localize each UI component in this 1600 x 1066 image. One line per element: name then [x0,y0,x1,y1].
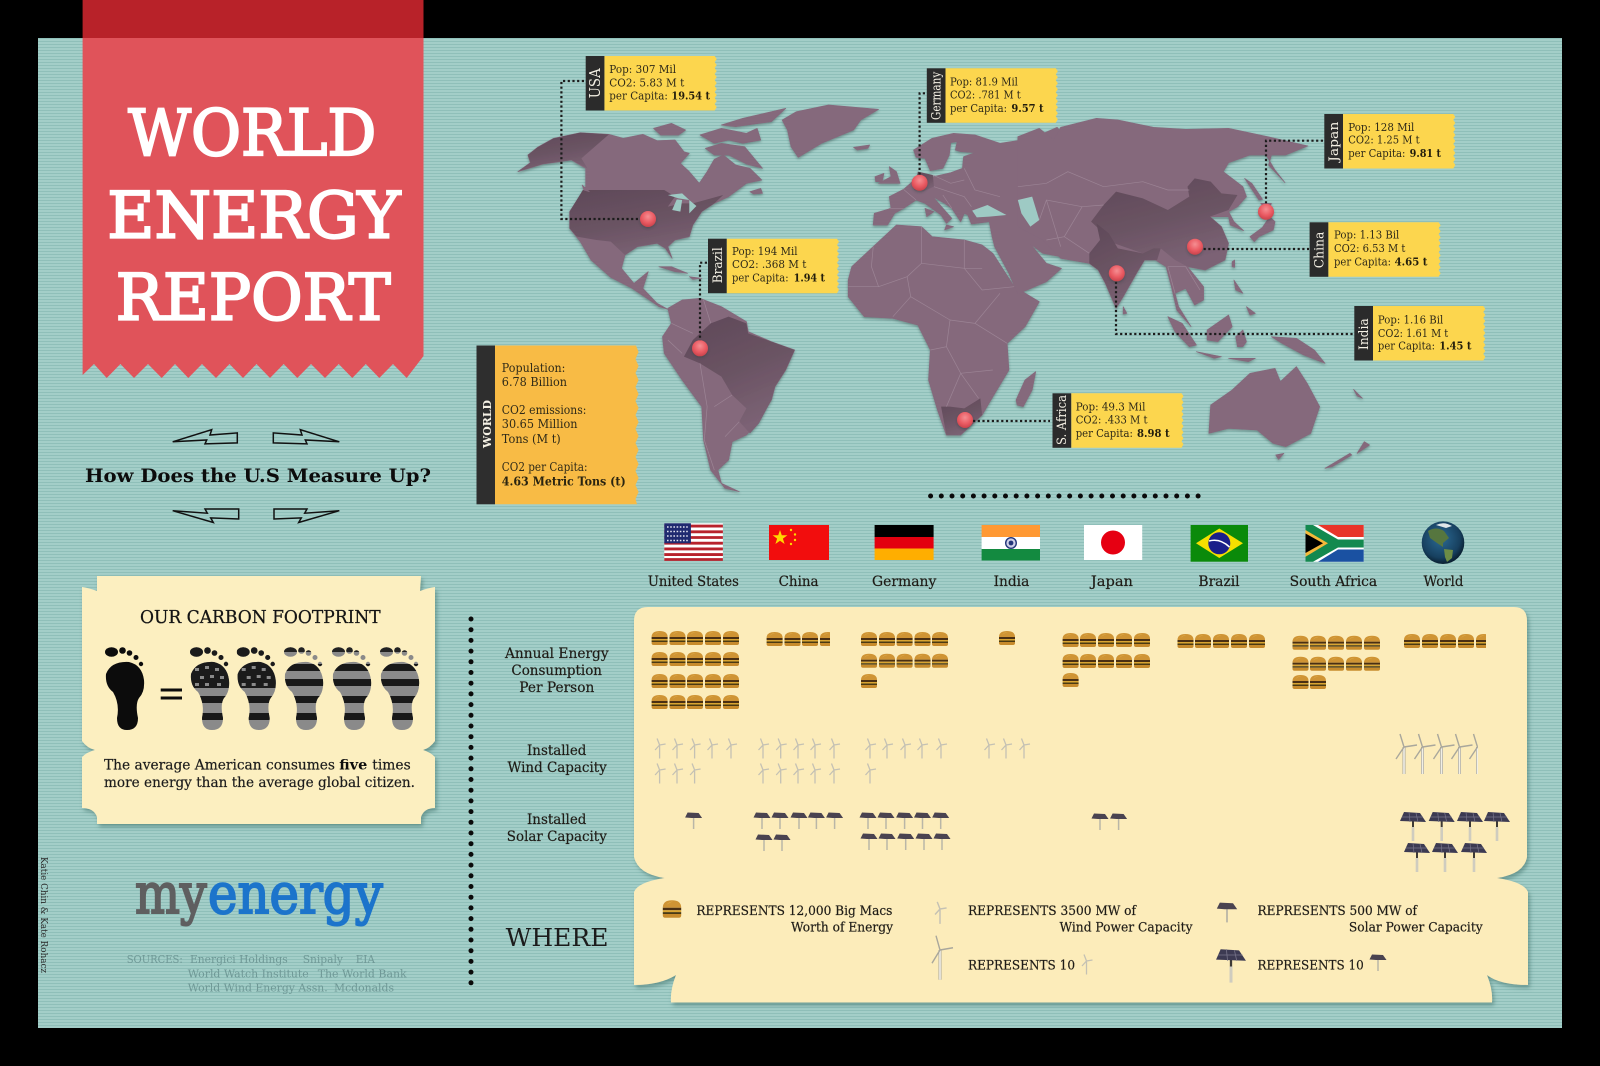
solar: United States [685,812,702,829]
burgers: India [999,631,1015,645]
callout: India: India [1357,318,1372,350]
row label: annual energy: Annual Energy [504,646,609,662]
title: ENERGY [107,180,401,254]
row label: wind capacity: Installed [527,743,587,759]
sources: Mcdonalds [334,982,394,994]
callout: Germany: Germany [930,71,944,120]
text: five times: The average American consumes [104,758,335,774]
callout: Japan [1324,114,1455,168]
dotted separator: horizontal [931,494,1203,498]
flag: India [982,525,1040,560]
icon: lightning bolts below heading [173,509,339,522]
callout: Japan: CO2: 1.25 M t [1348,133,1420,147]
burgers: Germany [861,632,948,688]
logo: myenergy [135,862,383,927]
callout: China [1310,222,1441,277]
flag: China [769,525,829,560]
flag: South Africa [1306,525,1364,562]
title: WORLD [128,97,376,171]
callout: China: 4.65 t [1395,254,1428,268]
callout: Japan: Pop: 128 Mil [1348,120,1415,134]
row label: solar capacity: Solar Capacity [507,829,607,845]
callout: India [1354,306,1485,360]
sources: The World Bank [318,968,407,980]
heading: How Does the U.S Measure Up?: How Does the U.S Measure Up? [85,465,431,487]
callout: South Africa: 8.98 t [1137,426,1170,440]
heading: WHERE: WHERE [506,924,608,952]
icon: globe [1422,521,1464,564]
legend: burger: REPRESENTS 12,000 Big Macs [696,904,892,919]
turbines: World [1396,734,1478,774]
callout: World: Tons (M t) [502,432,561,446]
solar: Germany [860,812,950,850]
callout: South Africa: S. Africa [1055,395,1070,445]
sources: Snipaly [303,953,344,966]
icons: striped footprints [190,646,422,732]
callout: India: Pop: 1.16 Bil [1378,313,1443,327]
callout: South Africa: CO2: .433 M t [1076,413,1148,427]
dotted separator: vertical [468,619,474,983]
callout: USA: 19.54 t [671,89,711,103]
callout: World: WORLD [481,400,494,449]
leader lines [561,81,1354,421]
sources: World Watch Institute [188,968,309,980]
burgers: China [767,632,836,646]
callout: India: CO2: 1.61 M t [1378,326,1449,340]
turbines: Germany [866,738,947,784]
callout: Germany: Pop: 81.9 Mil [950,74,1018,88]
callout: USA [586,56,717,110]
row label: wind capacity: Wind Capacity [508,760,607,776]
country labels: South Africa [1290,574,1377,590]
callout: Japan: per Capita: [1348,146,1405,160]
legend: large solar [1216,949,1386,983]
sources: Energici Holdings [190,953,288,966]
panel: our carbon footprint: OUR CARBON FOOTPRINT [140,608,381,628]
panel: our carbon footprint [82,576,435,824]
solar: Japan [1092,814,1127,830]
burgers: United States [652,631,739,709]
flag: Germany [875,525,934,560]
legend: small turbine [935,902,1193,936]
callout: Japan: 9.81 t [1410,146,1442,160]
callout: South Africa: Pop: 49.3 Mil [1076,399,1146,413]
turbines: United States [655,738,737,784]
row label: wind capacity [508,743,607,776]
callout: World: 6.78 Billion [502,375,567,389]
flag: Brazil [1191,525,1248,562]
turbines: China [758,738,840,784]
row label: annual energy [504,646,609,696]
callout: China: per Capita: [1334,254,1391,268]
callout: World [476,346,639,504]
callout: China: China [1312,231,1328,268]
legend: large solar: REPRESENTS 10 [1258,958,1364,974]
callout: India: 1.45 t [1439,339,1472,353]
country labels: Germany [872,574,937,590]
callout: World: 30.65 Million [502,417,578,431]
solar: World [1400,812,1510,872]
callout: World: 4.63 Metric Tons (t) [502,475,626,489]
legend: large turbine: REPRESENTS 10 [968,958,1075,974]
row label: solar capacity [507,812,607,845]
callout: Germany: 9.57 t [1011,101,1044,115]
title ribbon [83,0,423,378]
burgers: Japan [1063,633,1150,687]
solar: China [754,812,843,851]
sources: World Wind Energy Assn. [188,982,328,994]
row label: annual energy: Per Person [519,680,595,696]
flag: United States [664,523,723,560]
callout: USA: CO2: 5.83 M t [609,75,685,89]
turbines: India [984,738,1030,758]
title [107,97,401,336]
map markers [640,175,1274,428]
world map [518,105,1370,492]
burgers: World [1404,634,1492,648]
country labels: Brazil [1198,574,1240,590]
callout: Germany: per Capita: [950,101,1007,115]
title: REPORT [116,262,391,336]
callout: China: CO2: 6.53 M t [1334,241,1406,255]
callout: South Africa [1052,393,1184,448]
country labels: United States [648,574,739,590]
text: five times: more energy than the average global citizen. [104,775,415,791]
country labels: Japan [1089,574,1133,590]
sources [127,953,407,994]
country labels: World [1424,574,1464,590]
equals sign [161,690,182,698]
sources: EIA [356,953,376,966]
row label: solar capacity: Installed [527,812,587,828]
text: five times [104,758,415,791]
country labels: India [994,574,1029,590]
burgers: South Africa [1292,636,1380,689]
callout: Brazil: Pop: 194 Mil [732,244,798,258]
callout: Brazil: per Capita: [732,270,789,284]
icon: lightning bolts above heading [173,430,339,444]
callout: World: Population: [502,361,565,375]
text: five times: times [372,758,411,774]
country labels [648,574,1464,590]
burgers: Brazil [1178,634,1265,648]
text: five times: five [339,758,368,774]
legend: small solar [1217,903,1483,936]
callout: South Africa: per Capita: [1076,426,1133,440]
row label: annual energy: Consumption [511,663,602,679]
logo: myenergy: energy [208,862,383,927]
country labels: China [779,574,819,590]
legend: small turbine: REPRESENTS 3500 MW of [968,904,1137,919]
callout: Germany [927,68,1058,123]
callout: Japan: Japan [1327,121,1342,164]
legend: burger [663,900,894,936]
callout: India: per Capita: [1378,339,1435,353]
flag: Japan [1084,525,1142,560]
callout: Brazil: Brazil [711,247,726,283]
legend: small turbine: Wind Power Capacity [1060,920,1193,936]
logo: myenergy: my [135,862,207,927]
callout: Brazil: 1.94 t [794,270,826,284]
callout: USA: Pop: 307 Mil [609,62,676,76]
credit: Katie Chin & Kate Rohacz [38,857,49,973]
legend: large turbine [932,936,1092,980]
callout: World: CO2 per Capita: [502,460,588,474]
legend: burger: Worth of Energy [791,920,894,936]
icon: black footprint [105,647,144,730]
callout: Brazil: CO2: .368 M t [732,257,807,271]
callout: USA: per Capita: [609,89,668,103]
callout: China: Pop: 1.13 Bil [1334,228,1400,242]
panel: comparison table and legend [634,607,1528,1002]
callout: Germany: CO2: .781 M t [950,88,1021,102]
legend: small solar: Solar Power Capacity [1349,920,1483,936]
callout: World: CO2 emissions: [502,403,586,417]
sources: SOURCES: [127,953,183,966]
callout: Brazil [708,239,839,293]
legend: small solar: REPRESENTS 500 MW of [1258,904,1418,919]
callout: USA: USA [586,68,604,98]
